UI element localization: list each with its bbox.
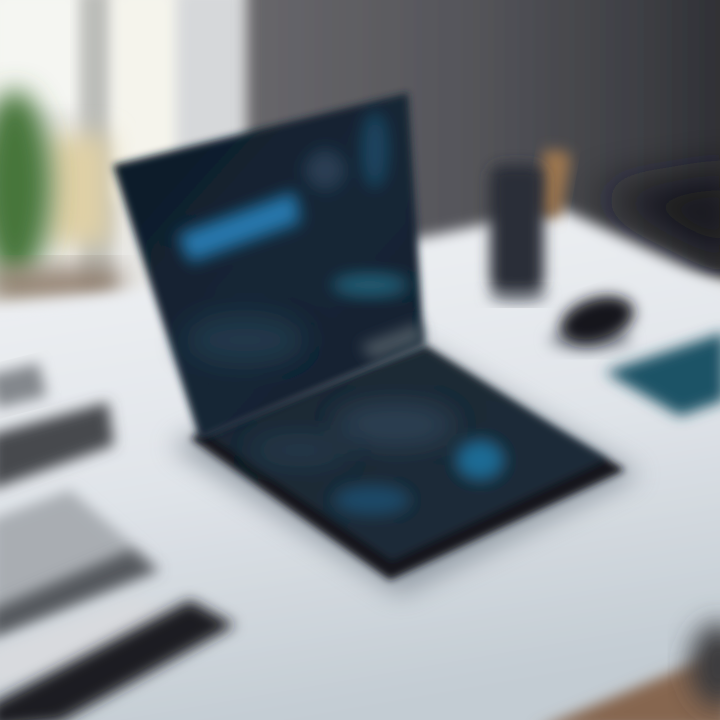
wood floor and dark corner [535, 623, 720, 720]
laptop screen [113, 93, 424, 440]
plant and sill [0, 90, 120, 300]
pen holder [488, 148, 572, 303]
teal notebook [605, 332, 720, 416]
laptop shadow [170, 345, 640, 595]
desk [0, 208, 720, 720]
background: window and wall [0, 0, 720, 320]
laptop hinge highlight [360, 322, 424, 360]
stacked objects left [0, 363, 235, 720]
laptop keyboard deck [190, 345, 625, 580]
mouse [548, 287, 640, 353]
